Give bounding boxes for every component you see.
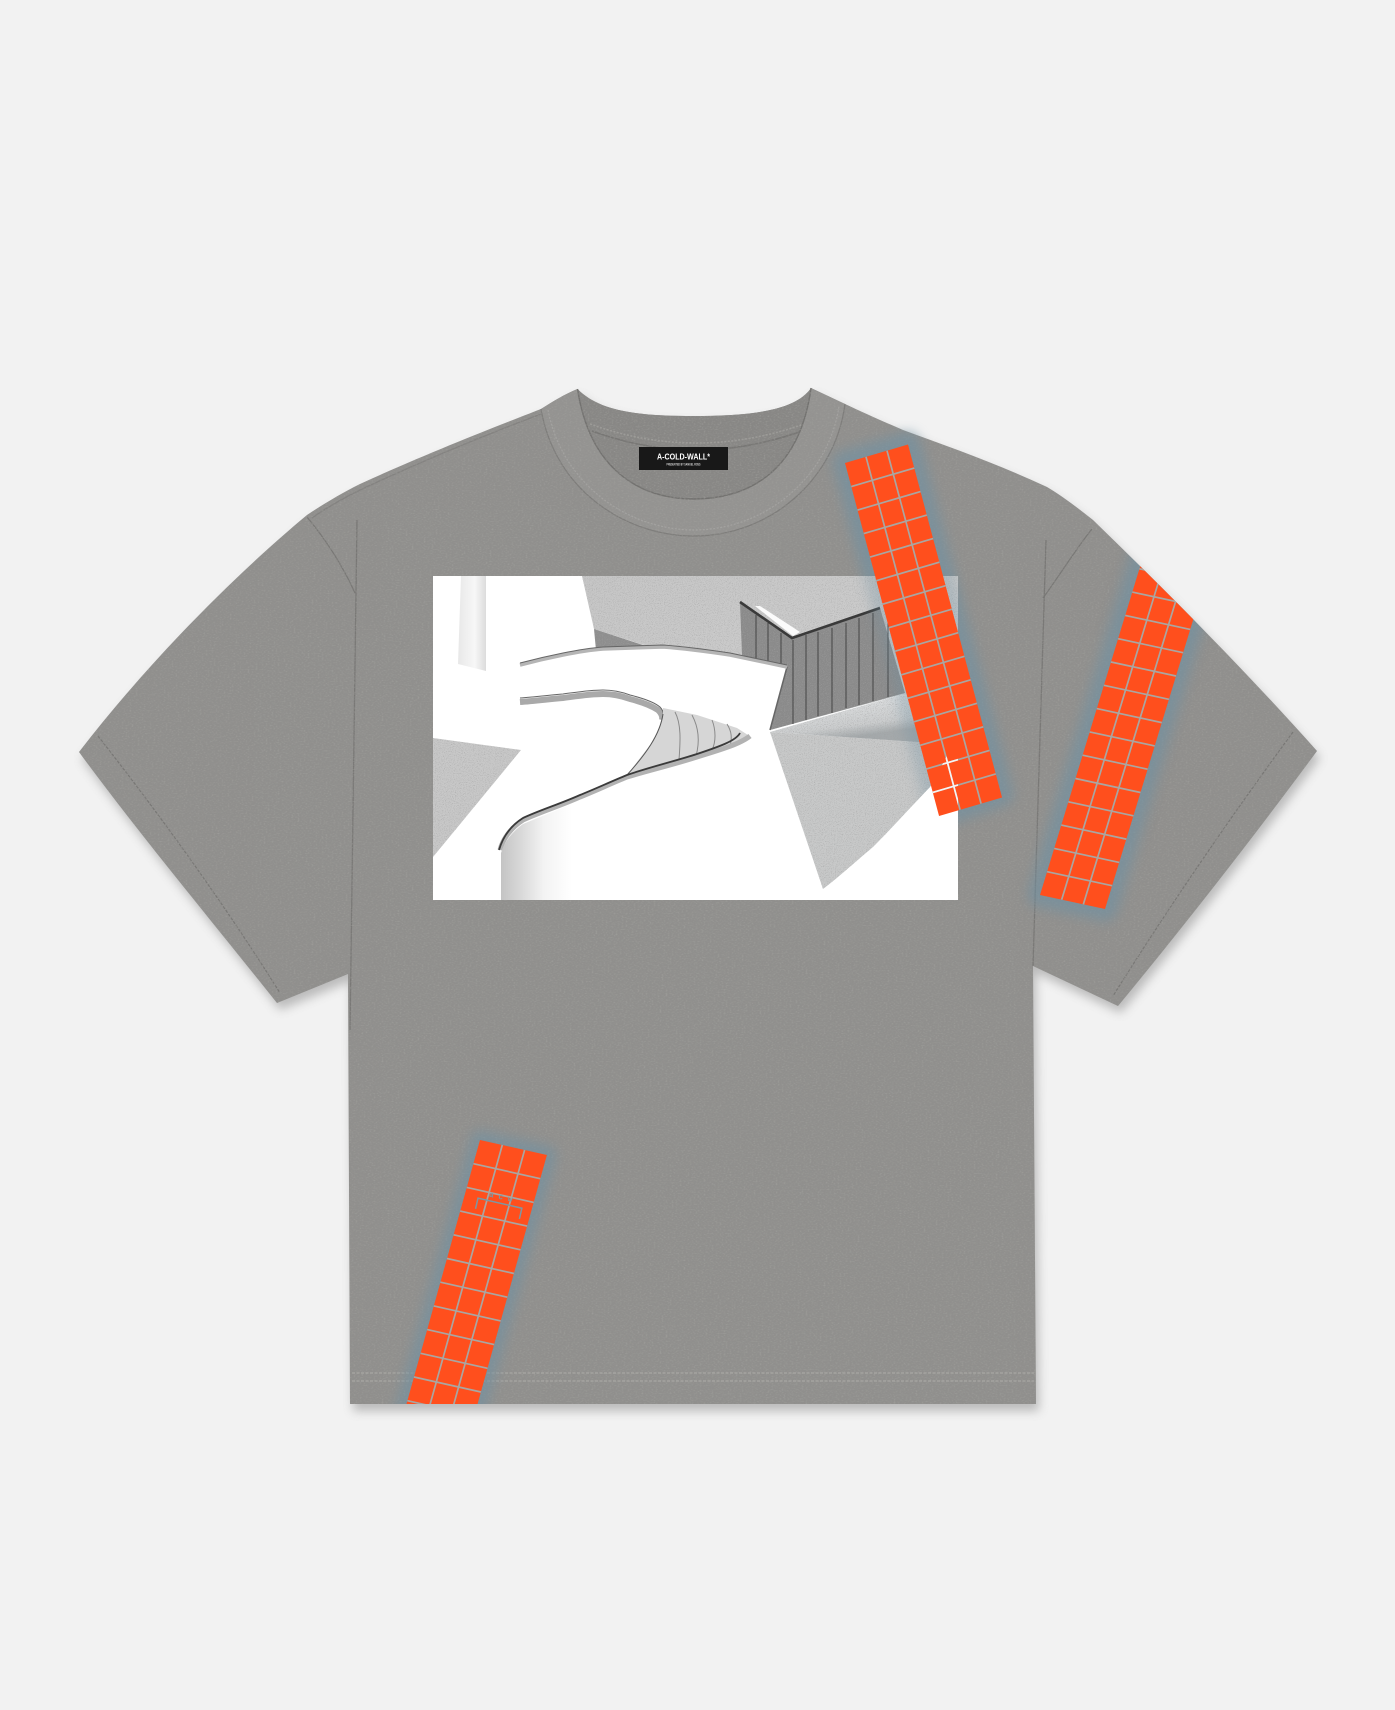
- fin with ribs: [627, 708, 748, 775]
- white grid lines over print: [845, 444, 1002, 816]
- orange tape: chest: [845, 444, 1002, 816]
- back neck band stitching: [590, 424, 804, 450]
- curved column shading: [501, 804, 572, 900]
- fan upper crease plane: [770, 695, 920, 742]
- shoulder and sleeve seams: [307, 414, 1092, 1030]
- architectural photo print: [433, 576, 958, 900]
- small dark wall strip: [594, 629, 644, 648]
- skylight: [755, 606, 800, 636]
- wall ridge: [740, 602, 880, 638]
- hem tape logo: [476, 1188, 524, 1219]
- hem stitching: [98, 732, 1293, 1381]
- t-shirt: [70, 380, 1330, 1410]
- hem tape logo: a c w: [488, 1191, 514, 1205]
- grid sleeve: [1040, 546, 1212, 909]
- grey concrete planes: [433, 576, 958, 889]
- drop shadow under shirt: [82, 395, 1320, 1411]
- lower rail: [520, 690, 664, 720]
- brand name: A-COLD-WALL*: [657, 452, 711, 462]
- back of neck interior: [578, 388, 811, 499]
- grid hem: [401, 1140, 547, 1439]
- label subtext: PRESENTED BY SAMUEL ROSS: [666, 462, 700, 466]
- halo hem: [401, 1140, 547, 1439]
- lower grey fan: [770, 732, 931, 889]
- orange tape: hem: [401, 1140, 547, 1439]
- neck label: [639, 447, 728, 470]
- upper grey wall: [582, 576, 958, 730]
- orange tape: sleeve: [1040, 545, 1212, 909]
- fabric texture: [70, 380, 1330, 1410]
- grid chest: [845, 444, 1002, 816]
- upper rail: [520, 645, 787, 667]
- front collar: [541, 388, 845, 536]
- halo sleeve: [1040, 545, 1211, 909]
- wall ribs: [756, 610, 888, 730]
- lower left grey triangle: [433, 738, 521, 857]
- swooping handrail: [499, 733, 750, 850]
- chest tape halo tint on print: [845, 444, 1001, 816]
- shirt body: [79, 388, 1317, 1404]
- corrugated dark wall: [740, 602, 905, 730]
- window recess: [458, 576, 486, 671]
- chest tape halo on fabric: [845, 444, 1001, 816]
